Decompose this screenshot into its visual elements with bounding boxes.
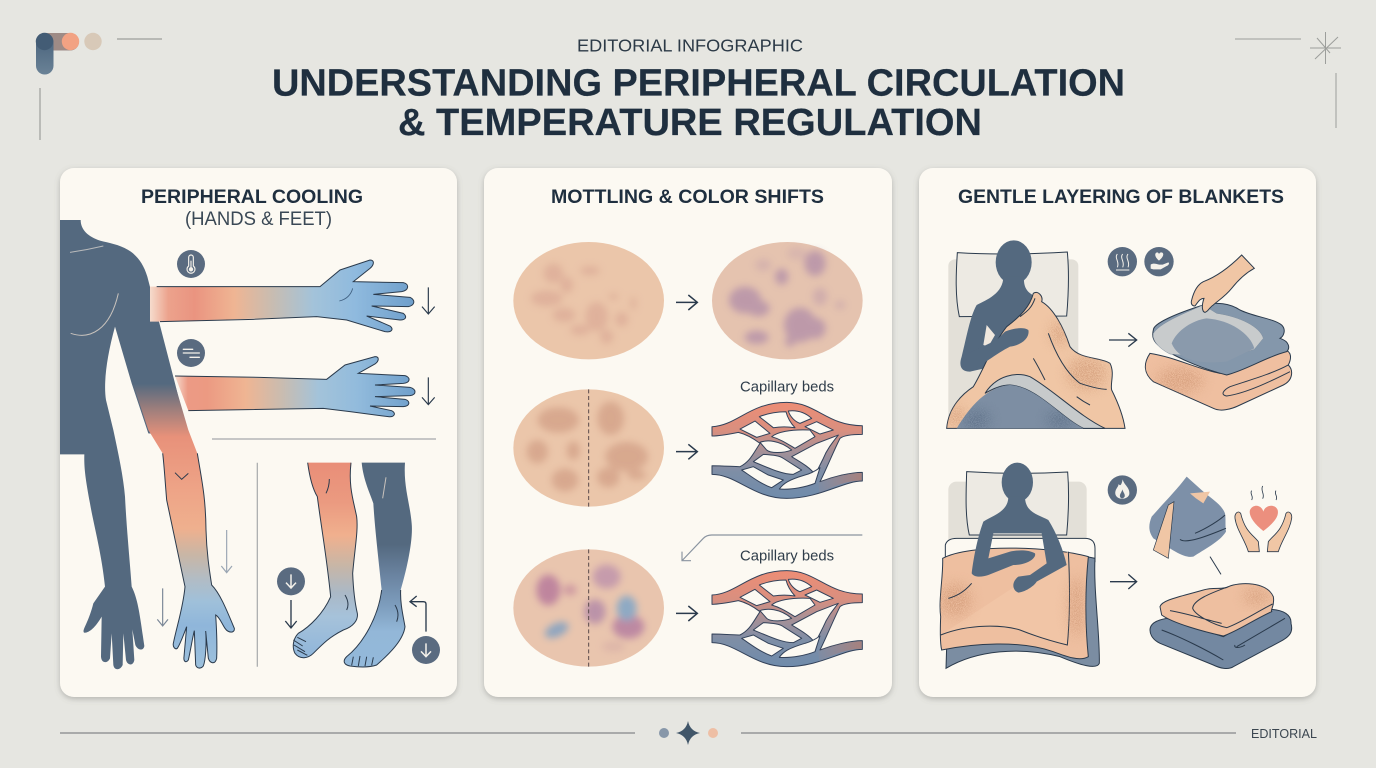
arrow: dark down with badge: [277, 567, 305, 628]
capillary network: [712, 571, 862, 667]
folded blue blanket: [1149, 477, 1226, 574]
arrow: light down: [221, 530, 232, 573]
icon: warmth steam: [1108, 247, 1137, 276]
arrow: down one: [422, 287, 435, 314]
arrow: hook with badge: [410, 596, 440, 664]
folded blankets with hand: [1145, 255, 1292, 410]
arrow: [676, 606, 697, 621]
panel heading: [141, 187, 363, 230]
person under blanket, reclined: [947, 240, 1125, 430]
main title: [272, 62, 1125, 144]
arrow: bent pointer: [682, 535, 862, 561]
arrow: [1110, 574, 1137, 589]
person in bed with blankets: [938, 463, 1099, 668]
icon: caring hand with heart: [1144, 247, 1174, 276]
label: capillary beds: Capillary beds: [740, 380, 834, 396]
icon: flame: [1108, 475, 1137, 505]
warm leg: [293, 463, 357, 658]
horizontal arm one: [150, 250, 435, 332]
panel: mottling and color shifts: [484, 168, 892, 697]
panel: gentle layering of blankets: [919, 168, 1316, 697]
dividers: [212, 439, 436, 667]
panel card: [919, 168, 1316, 697]
skin patch: faint mottling: [513, 242, 664, 359]
panel heading: MOTTLING & COLOR SHIFTS: [551, 187, 824, 208]
skin patch: divided tan mottling: [513, 389, 664, 507]
icon: cold lines: [177, 339, 205, 367]
arrow: [676, 444, 697, 459]
panel: peripheral cooling: [60, 168, 457, 697]
panel heading: GENTLE LAYERING OF BLANKETS: [958, 187, 1284, 208]
icon: heart in hands: [1235, 486, 1292, 552]
main title: UNDERSTANDING PERIPHERAL CIRCULATION: [272, 62, 1125, 104]
footer rule and ornament: [60, 721, 1236, 745]
label: capillary beds: Capillary beds: [740, 548, 834, 564]
decoration: top right star and rules: [1235, 32, 1341, 128]
logo mark: top left dots: [36, 33, 162, 140]
panel card: [484, 168, 892, 697]
icon: thermometer: [177, 250, 205, 278]
stacked blankets: [1150, 584, 1292, 668]
skin patch: purple mottling: [712, 242, 863, 359]
cool leg: [344, 463, 412, 667]
panel card: [60, 168, 457, 697]
main title: & TEMPERATURE REGULATION: [398, 102, 982, 144]
legs and feet: [277, 463, 440, 667]
arrow: grey down: [157, 588, 168, 626]
body silhouette with dark arm and hand: [60, 220, 188, 669]
gradient arm and hand, warm to cool: [132, 373, 234, 668]
arrow: down two: [422, 377, 435, 405]
arrow: [676, 295, 697, 310]
panel heading: PERIPHERAL COOLING: [141, 187, 363, 208]
panel heading: (HANDS & FEET): [185, 209, 332, 230]
capillary network: [712, 402, 862, 498]
eyebrow heading: EDITORIAL INFOGRAPHIC: [577, 36, 803, 56]
arrow: [1109, 333, 1137, 347]
footer label: EDITORIAL: [1251, 727, 1317, 741]
horizontal arm two: [175, 339, 435, 417]
skin patch: severe mottling: [513, 549, 664, 667]
